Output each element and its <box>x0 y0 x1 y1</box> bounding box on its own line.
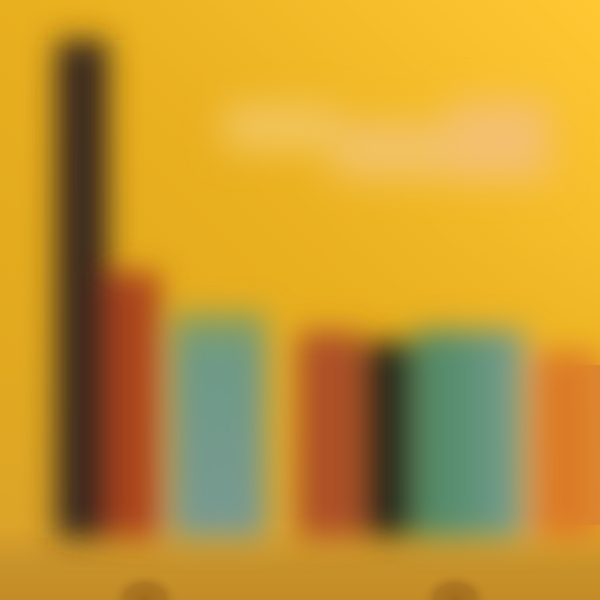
bar: rust <box>298 332 360 538</box>
bar: green teal <box>416 330 524 538</box>
bar: teal <box>172 312 266 538</box>
baseline band <box>0 525 600 600</box>
bar: tall dark <box>56 40 108 538</box>
footer mark: left <box>110 545 180 600</box>
footer mark: right <box>420 545 490 600</box>
bar: red orange <box>108 272 160 538</box>
heading: pale blurred title <box>225 100 550 180</box>
bar: orange <box>534 352 600 538</box>
orange bar right edge <box>570 365 600 525</box>
bar: dark olive <box>362 342 414 536</box>
bar chart <box>56 40 600 538</box>
